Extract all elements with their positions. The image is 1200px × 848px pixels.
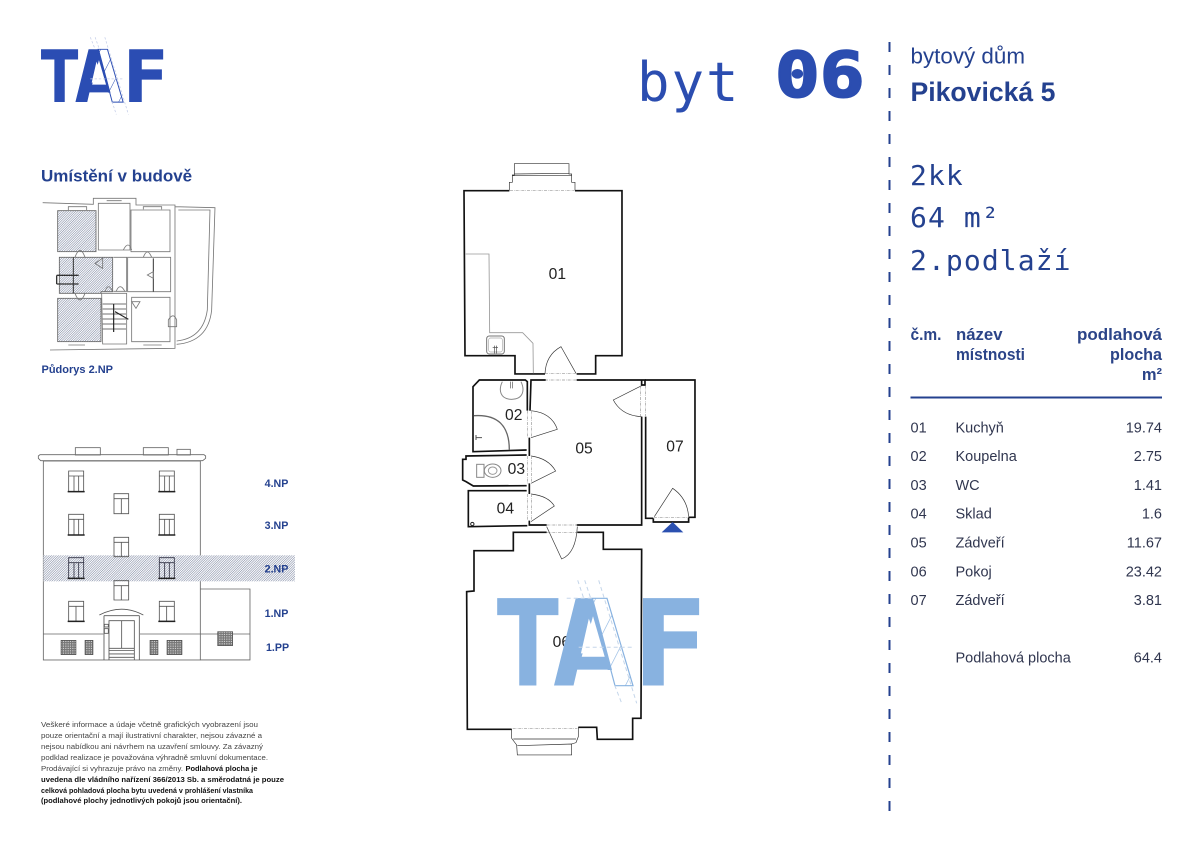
elevation: windows [68,471,175,621]
table header: název [956,326,1003,344]
building name: bytový dům [910,44,1025,68]
apartment summary: 2kk [910,159,964,192]
elevation: floor labels [265,478,289,654]
elevation: facade [38,448,250,660]
table rows: 07 [910,593,927,609]
disclaimer text: Prodávající si vyhrazuje právo na změny. [41,764,183,773]
floor plan: rooms 02 to 05 and 07 [463,373,695,532]
table rows: Koupelna [956,449,1018,465]
icon: entrance arrow [662,522,683,532]
heading: location in building: Umístění v budově [41,166,192,186]
table rows: 03 [910,478,927,494]
elevation: floor labels: 2.NP [265,563,288,575]
room 02 [473,380,557,452]
table rows: Pokoj [956,564,992,580]
watermark logo: TAF: F [633,576,708,715]
heading: apartment number: 06 [775,39,865,112]
elevation: basement windows [61,632,233,655]
table rows: 19.74 [1126,420,1162,436]
table rows: WC [956,478,980,494]
room 01: kitchen counter and sink [466,254,533,373]
disclaimer text: pouze orientační a mají ilustrativní charakter, nejsou závazné a [41,731,263,740]
elevation: entrance [99,609,143,660]
table total [956,650,1162,666]
table rows: 3.81 [1134,593,1162,609]
table rows: 1.6 [1142,507,1162,523]
disclaimer text: (podlahové plochy jednotlivých pokojů jsou orientační). [41,796,242,805]
table rows: 06 [910,564,927,580]
disclaimer text: celková pohladová plocha bytu uvedená v prohlášení vlastníka [41,786,254,795]
floor plan: room 06: 06 [553,634,570,651]
disclaimer text [41,720,284,805]
room 06: door [547,527,577,559]
elevation: floor labels: 1.NP [265,608,288,620]
caption: floor plan: Půdorys 2.NP [42,364,113,376]
watermark logo: TAF: T [497,576,559,715]
disclaimer text: podklad realizace je považována výhradně smluvní dokumentace. [41,753,268,762]
disclaimer text: uvedena dle vládního nařízení 366/2013 Sb. a směrodatná je pouze [41,775,284,784]
floor key plan [43,198,215,350]
table header: místnosti [956,346,1025,364]
room 04: 04 [497,500,514,517]
table header: podlahová [1077,326,1163,344]
watermark logo: TAF [497,580,700,704]
building name: Pikovická 5 [910,77,1056,107]
room 06: window bay [512,727,578,755]
table rows [910,420,1162,609]
apartment summary: 2.podlaží [910,244,1072,277]
table header: č.m. [910,326,942,344]
room 05 [529,373,646,532]
table rows: Kuchyň [956,420,1004,436]
logo: TAF [41,37,164,114]
table header: m² [1142,366,1162,384]
apartment summary: 64 m² [910,201,1000,234]
table rows: 1.41 [1134,478,1162,494]
apartment summary [910,159,1072,277]
disclaimer text: nejsou nabídkou ani návrhem na uzavření smlouvy. Za závazný [41,742,263,751]
elevation: floor labels: 1.PP [266,642,289,654]
table rows: Sklad [956,507,992,523]
table rows: 11.67 [1127,535,1162,551]
table rows: 05 [910,535,927,551]
floor plan: room 01 [464,164,622,374]
table header: plocha [1110,346,1163,364]
floor plan: room 01: 01 [549,266,566,283]
room 01: window bay [509,164,575,191]
watermark logo: TAF: A [546,576,636,715]
room 05: 05 [575,440,593,457]
building name [910,44,1056,107]
disclaimer text: Podlahová plocha je [186,764,258,773]
room 01: door [545,347,576,374]
elevation: floor labels: 3.NP [265,520,288,532]
room 04 [468,491,554,527]
elevation: highlighted floor [43,555,295,581]
building elevation [38,448,295,660]
elevation: floor labels: 4.NP [265,478,288,490]
room 07: 07 [666,439,684,456]
floor plan: room 06 [467,527,642,755]
table rows: 01 [910,420,927,436]
logo: TAF: T [41,36,78,120]
table rows: 23.42 [1126,564,1162,580]
logo: TAF: F [123,36,169,120]
table total: 64.4 [1134,650,1162,666]
heading: apartment number: byt [637,51,741,114]
disclaimer text: Veškeré informace a údaje včetně grafických vyobrazení jsou [41,720,258,729]
table rows: 2.75 [1134,449,1162,465]
room 07 [645,380,695,522]
table total: Podlahová plocha [956,650,1072,666]
room 03 [463,455,556,486]
logo: TAF: A [70,36,125,120]
room 02: 02 [505,407,522,424]
table rows: Zádveří [956,535,1005,551]
table rows: 04 [910,507,927,523]
table header [910,326,1163,398]
heading: apartment number [637,39,865,114]
room 03: 03 [508,461,525,478]
dashed divider [888,42,890,812]
room table [910,326,1163,666]
table rows: Zádveří [956,593,1005,609]
table rows: 02 [910,449,927,465]
